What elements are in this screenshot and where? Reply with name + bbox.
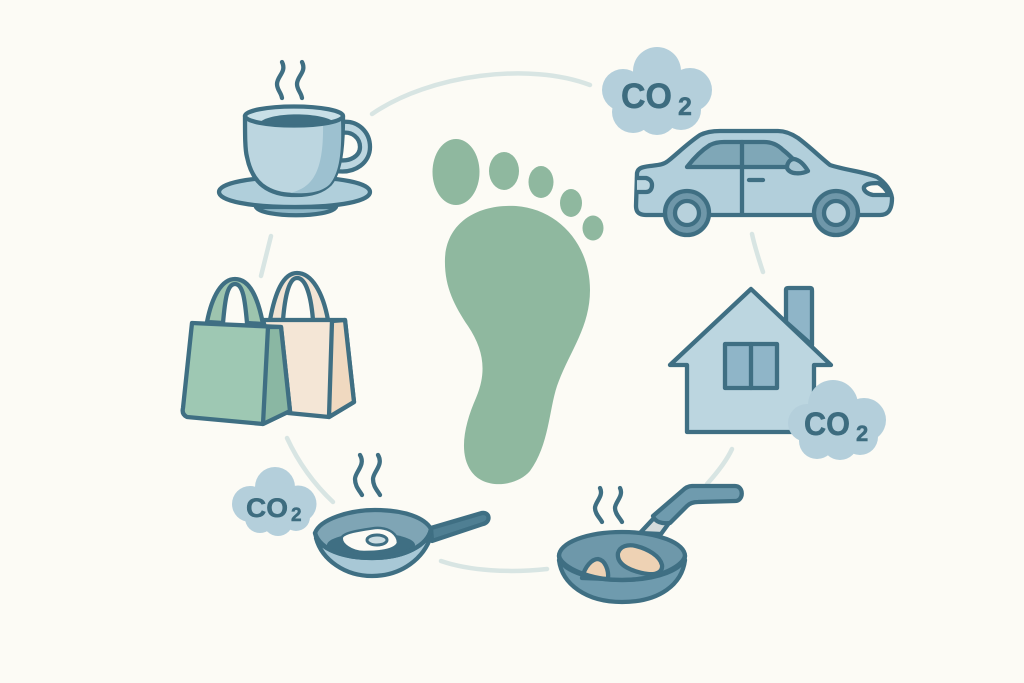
wheels	[665, 191, 709, 235]
icon: coffee cup	[219, 62, 370, 215]
CO2 cloud: top	[602, 47, 712, 135]
CO2 cloud: top: 2	[678, 93, 692, 121]
steam	[355, 455, 380, 495]
CO2 cloud: house: 2	[856, 421, 868, 446]
CO2 cloud: pan	[232, 467, 316, 536]
icon: frying pan with egg	[315, 455, 489, 576]
CO2 cloud: house: CO	[804, 406, 850, 442]
green bag	[183, 279, 290, 424]
rim and coffee	[245, 106, 343, 126]
icon: car	[636, 131, 892, 235]
saucer	[256, 207, 336, 215]
CO2 cloud: top: CO	[621, 77, 672, 116]
icon: frying pan with potatoes	[559, 486, 742, 602]
CO2 cloud: pan: CO	[246, 493, 288, 523]
pan	[316, 536, 431, 576]
handle	[336, 122, 370, 171]
cup body	[245, 116, 343, 195]
icon: shopping bags	[183, 273, 354, 424]
pan	[559, 560, 685, 602]
CO2 cloud: pan: 2	[291, 505, 302, 526]
handle	[640, 518, 669, 534]
steam	[277, 62, 303, 98]
CO2 cloud: house	[788, 380, 886, 460]
icon: house	[670, 288, 831, 432]
cream bag	[263, 273, 354, 417]
steam	[595, 488, 622, 522]
icon: footprint	[432, 139, 604, 484]
handle	[431, 513, 489, 541]
